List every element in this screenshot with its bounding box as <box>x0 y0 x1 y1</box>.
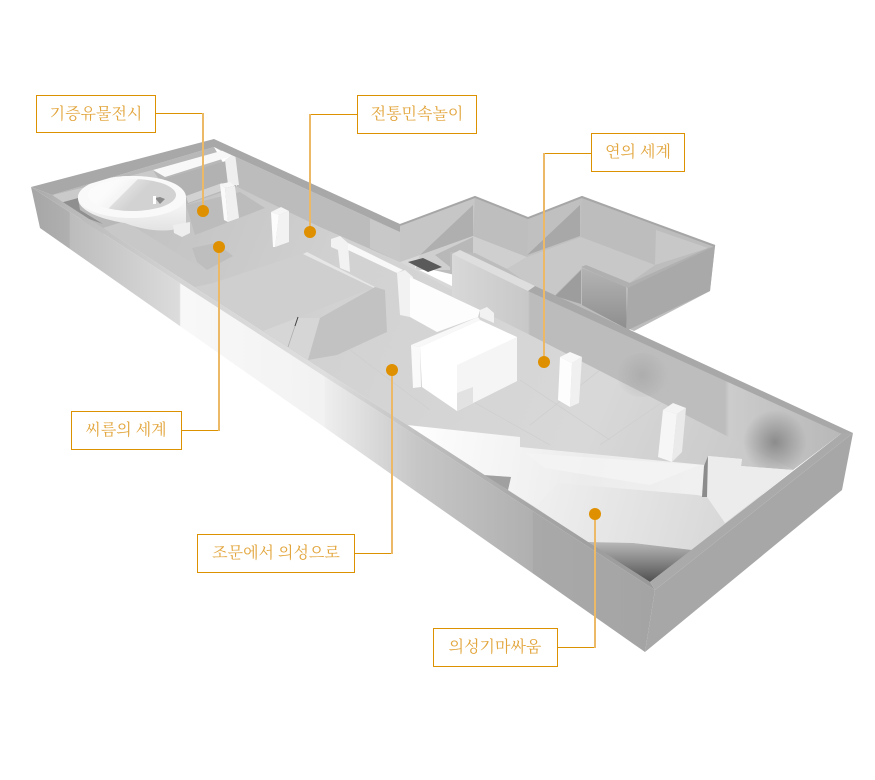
back-left wall <box>52 147 237 235</box>
back wall <box>214 147 400 262</box>
callout: 연의 세계 <box>538 134 684 368</box>
front rim <box>31 187 655 590</box>
annex pocket <box>582 268 627 329</box>
ring sculpture <box>78 176 190 237</box>
annex outer wall <box>626 246 715 331</box>
pillar 3 <box>558 352 582 407</box>
callout: 기증유물전시 <box>36 96 209 217</box>
callout: 의성기마싸움 <box>434 508 601 666</box>
white fence <box>331 236 413 317</box>
right plane <box>707 456 793 523</box>
icon: dark floor hatch <box>408 258 442 272</box>
annex wing <box>400 197 715 331</box>
white long wall <box>410 277 480 332</box>
dark wedge corner <box>587 542 692 582</box>
callout: 조문에서 의성으로: 조문에서 의성으로 <box>212 543 340 562</box>
right wall <box>645 433 853 652</box>
callout: 전통민속놀이: 전통민속놀이 <box>371 104 463 123</box>
floor shadow patch <box>192 243 233 270</box>
ledge along front wall <box>103 221 213 287</box>
pillar 1 <box>220 182 239 222</box>
exhibition hall 3D model <box>31 139 853 652</box>
back frame <box>153 149 239 185</box>
pillar 4 <box>658 403 686 462</box>
back rim <box>31 139 400 232</box>
right rim <box>650 433 853 590</box>
callout: 조문에서 의성으로 <box>198 364 398 572</box>
annex room 1 walls <box>400 198 475 262</box>
white floor installation <box>407 425 793 582</box>
callout: 씨름의 세계 <box>72 241 225 450</box>
front wall <box>31 187 655 652</box>
callout: 연의 세계: 연의 세계 <box>605 142 671 161</box>
callout: 기증유물전시: 기증유물전시 <box>50 104 142 123</box>
long partition wall <box>452 250 853 474</box>
callout: 씨름의 세계: 씨름의 세계 <box>85 420 167 439</box>
upper plane <box>535 470 793 550</box>
callout: 전통민속놀이 <box>304 96 476 238</box>
large white box <box>411 307 517 411</box>
callout: 의성기마싸움: 의성기마싸움 <box>449 637 542 656</box>
platform <box>195 252 387 360</box>
pillar 2 <box>271 207 289 247</box>
annex floors <box>415 236 527 270</box>
floor <box>52 187 793 582</box>
floor tile lines <box>350 350 680 445</box>
ramp crack <box>288 317 298 347</box>
